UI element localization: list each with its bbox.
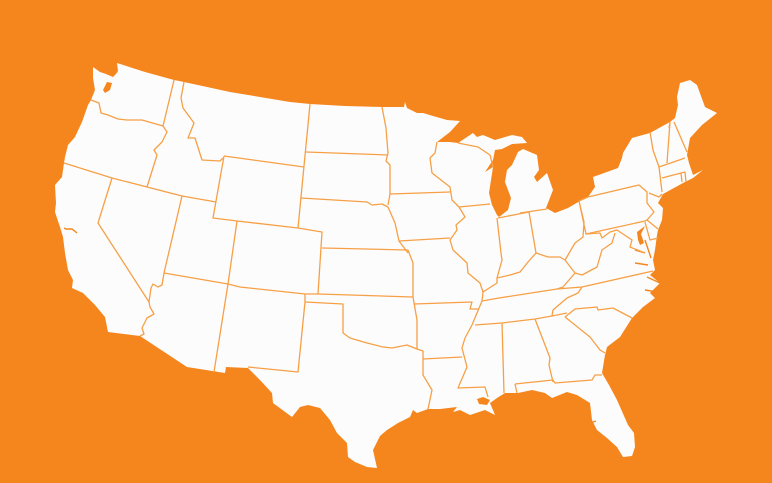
landmass silhouette xyxy=(55,63,717,468)
coastal inlets xyxy=(64,228,660,422)
map: contiguous United States xyxy=(55,63,717,468)
puget sound, bays and lake cutouts xyxy=(103,82,645,405)
state borders xyxy=(64,80,687,409)
